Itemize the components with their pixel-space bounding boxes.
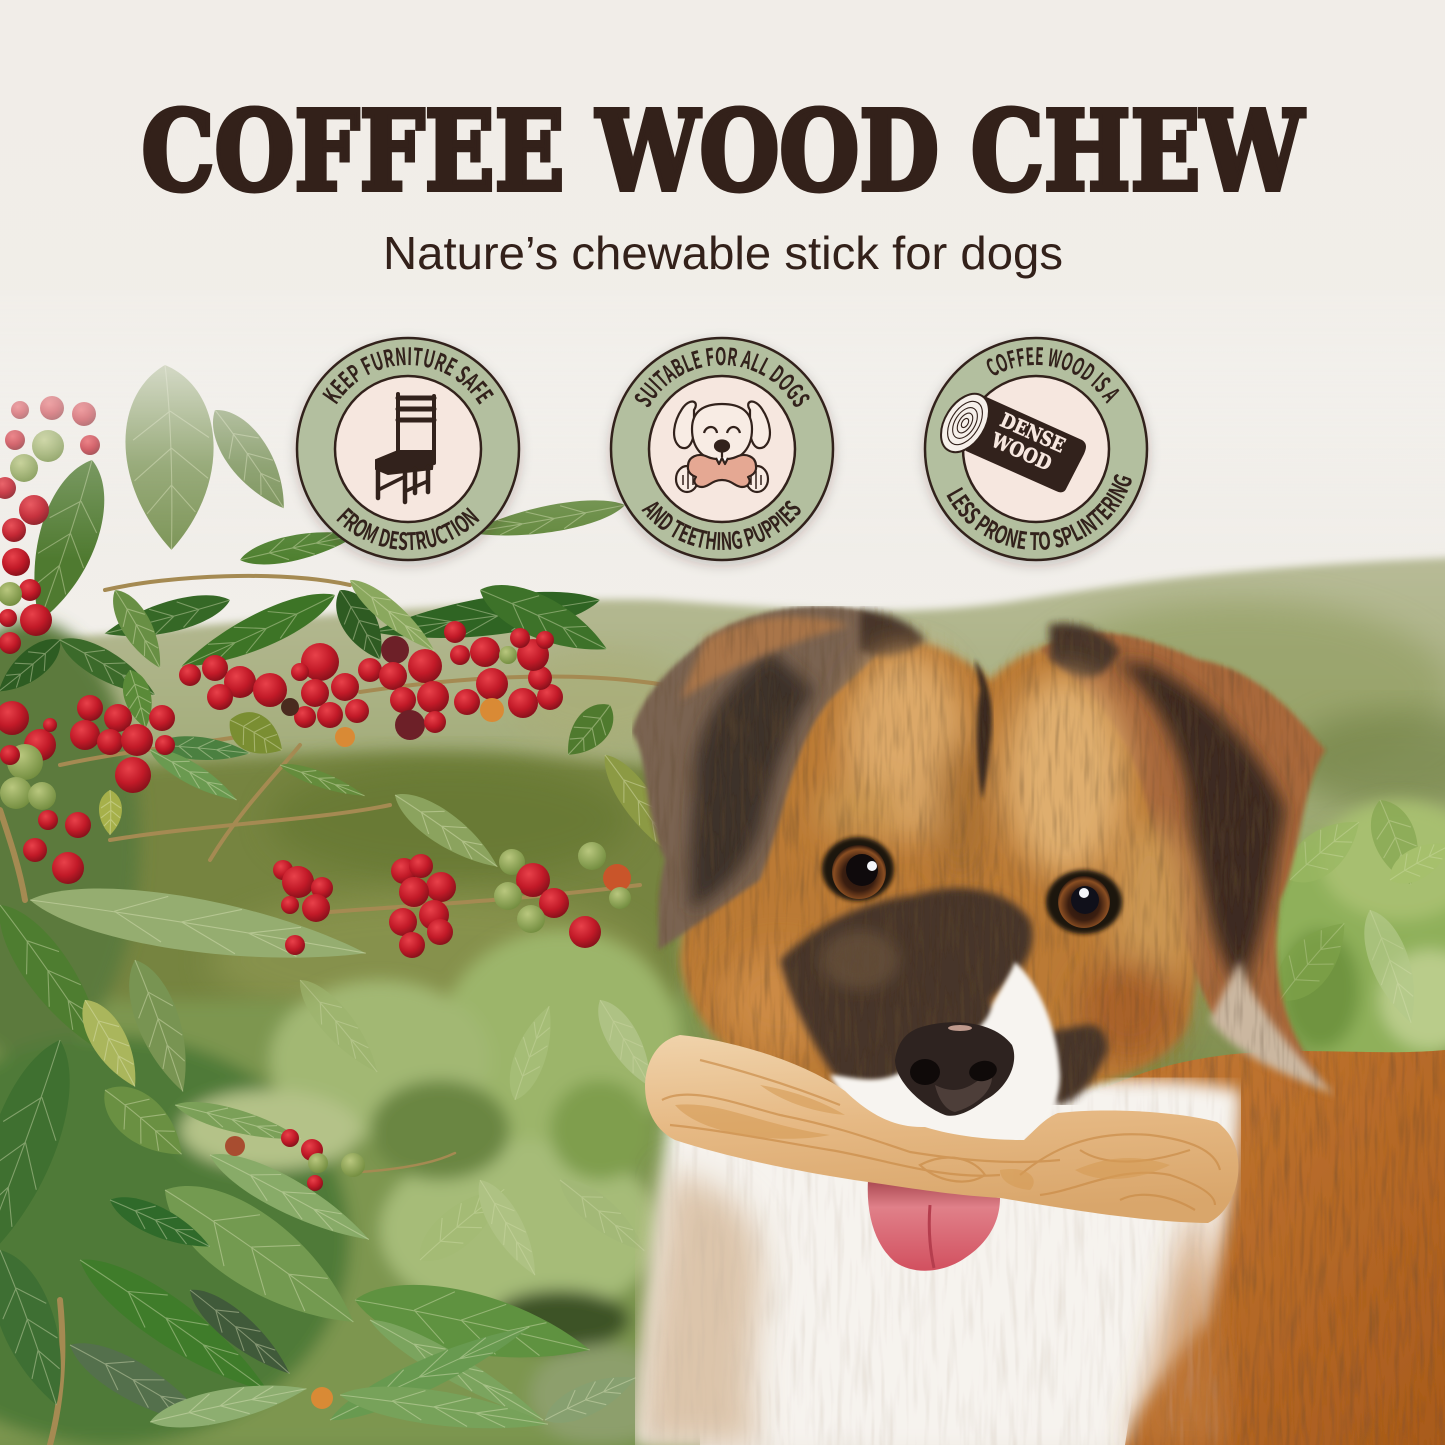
upper leaves <box>123 363 217 551</box>
white blaze and muzzle <box>830 962 1060 1145</box>
dog head <box>680 639 1199 1100</box>
icon: chair <box>376 394 434 502</box>
top white fade over the scene <box>0 290 1445 560</box>
dog head fur <box>632 606 1335 1105</box>
subtitle: Nature’s chewable stick for dogs <box>383 227 1063 279</box>
badge top text: COFFEE WOOD IS A <box>986 347 1120 404</box>
log label: DENSE <box>997 409 1068 458</box>
large pale leaf <box>26 872 370 979</box>
foreground ground base <box>0 1040 700 1445</box>
foreground coffee bushes, blurred <box>0 620 1445 1445</box>
dog body <box>1100 1050 1445 1445</box>
badge: keep furniture safe <box>290 336 526 571</box>
badge bottom text: FROM DESTRUCTION <box>336 507 480 550</box>
left eye <box>822 837 894 901</box>
badge top text: SUITABLE FOR ALL DOGS <box>634 347 810 408</box>
tongue <box>868 1180 1000 1271</box>
left ear <box>632 606 890 950</box>
badge top text: KEEP FURNITURE SAFE <box>322 347 494 405</box>
dog holding a coffee wood stick <box>632 606 1445 1445</box>
nose <box>895 1022 1014 1116</box>
forehead highlights <box>720 650 1190 1060</box>
coffee wood stick <box>645 1035 1238 1223</box>
right eye <box>1046 870 1122 934</box>
log label: WOOD <box>987 429 1055 476</box>
brown muzzle mask <box>780 888 1108 1105</box>
badge bottom text: AND TEETHING PUPPIES <box>641 500 801 550</box>
dog chest <box>635 1078 1241 1445</box>
branch stems <box>0 576 665 1445</box>
icon: log <box>931 385 1086 492</box>
badge: suitable for all dogs <box>604 336 840 571</box>
badge bottom text: LESS PRONE TO SPLINTERING <box>946 474 1132 550</box>
berries <box>32 430 64 462</box>
centre parting <box>975 660 992 800</box>
distant hills <box>0 555 1445 1100</box>
bush leaf textures <box>289 793 1445 1283</box>
coffee branch with leaves and berries <box>0 363 690 1445</box>
icon: puppy with bone <box>674 402 770 492</box>
right ear <box>1040 632 1330 1090</box>
badge: dense wood <box>918 336 1154 571</box>
lower leaves <box>145 1159 375 1351</box>
